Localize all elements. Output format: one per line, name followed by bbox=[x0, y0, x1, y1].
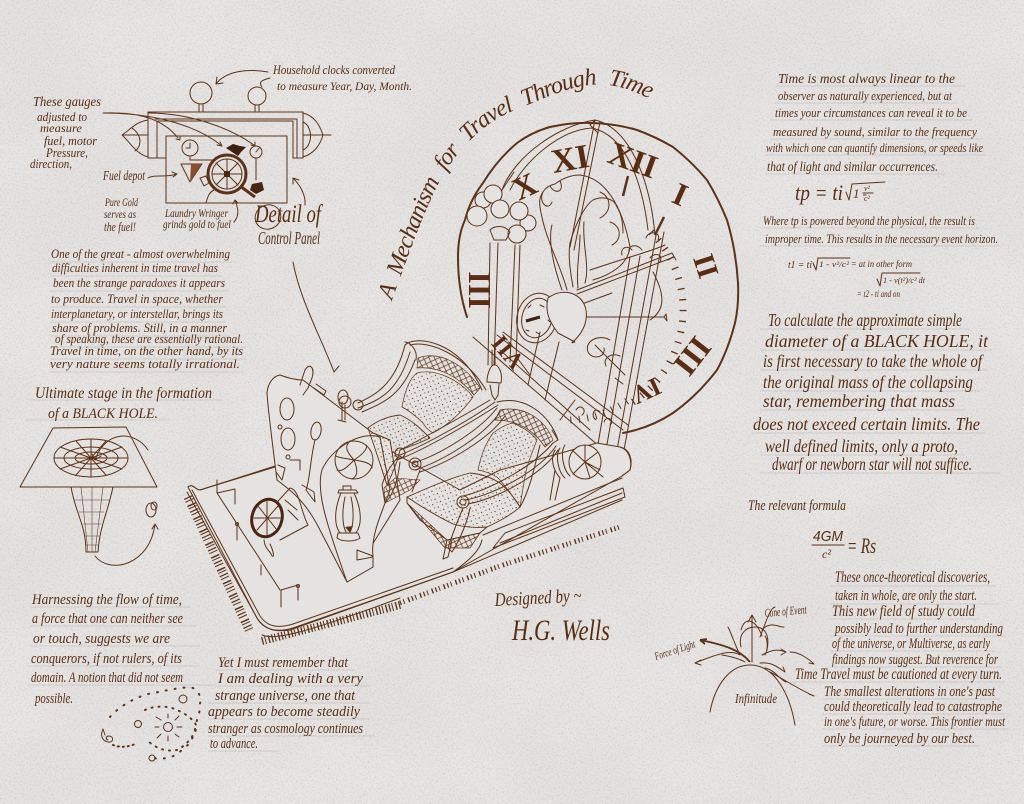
icon: left gauge bbox=[190, 82, 212, 112]
text block: linear time: Time is most always linear to the bbox=[778, 72, 955, 87]
text block: improper time bbox=[763, 214, 998, 246]
roman numerals: XI bbox=[548, 138, 592, 181]
text block: black hole diameter: diameter of a BLACK HOLE, it bbox=[765, 331, 989, 351]
label: force of light: Force of Light bbox=[653, 638, 697, 663]
icon: exit sphere bbox=[146, 502, 157, 517]
clock hands bbox=[560, 253, 676, 321]
note: fuel depot: Fuel depot bbox=[102, 169, 146, 184]
fringe bbox=[188, 497, 620, 641]
icon: fuel triangle bbox=[181, 164, 202, 182]
note: detail of control panel: Detail of bbox=[254, 201, 323, 228]
text block: strange universe: Yet I must remember that bbox=[218, 655, 349, 671]
support columns bbox=[473, 230, 665, 450]
text block: strange universe: stranger as cosmology continues bbox=[208, 721, 363, 737]
arrow: detail to console bbox=[293, 262, 339, 372]
text block: strange universe: strange universe, one that bbox=[215, 688, 356, 704]
roman numerals: I bbox=[667, 175, 693, 213]
roman numerals bbox=[461, 136, 725, 410]
note: gauges: Pressure, bbox=[45, 145, 88, 160]
roman numerals: IV bbox=[627, 371, 666, 410]
note: laundry wringer bbox=[163, 200, 238, 231]
text block: paradoxes paragraph bbox=[50, 246, 243, 371]
text block: strange universe bbox=[208, 655, 364, 752]
note: gauges: measure bbox=[40, 121, 83, 135]
text block: black hole diameter: does not exceed certain limits. The bbox=[753, 414, 980, 434]
text block: paradoxes paragraph: been the strange paradoxes it appears bbox=[53, 275, 225, 290]
heading: black hole stage: of a BLACK HOLE. bbox=[48, 406, 158, 422]
note: pure gold bbox=[104, 195, 139, 234]
text block: strange universe: I am dealing with a very bbox=[217, 671, 364, 687]
note: gauges: adjusted to bbox=[37, 109, 87, 124]
icon: right gauge bbox=[248, 87, 266, 112]
note: detail of control panel bbox=[251, 178, 323, 248]
balloons bbox=[467, 185, 536, 243]
text block: future discoveries: This new field of study could bbox=[832, 603, 975, 620]
text block: harnessing time: conquerors, if not rulers, of its bbox=[31, 651, 182, 667]
text block: linear time: observer as naturally experienced, but at bbox=[778, 89, 952, 103]
text block: paradoxes paragraph: share of problems. Still, in a manner bbox=[52, 320, 228, 335]
text block: black hole diameter: the original mass of the collapsing bbox=[763, 372, 973, 392]
note: household clocks bbox=[272, 62, 412, 93]
text block: harnessing time: a force that one can neither see bbox=[32, 611, 183, 627]
text block: paradoxes paragraph: One of the great - almost overwhelming bbox=[51, 246, 230, 261]
text block: harnessing time: or touch, suggests we are bbox=[33, 631, 171, 647]
text block: black hole diameter: star, remembering that mass bbox=[763, 391, 955, 411]
text block: linear time: measured by sound, similar to the frequency bbox=[773, 125, 977, 139]
clock face bbox=[458, 120, 738, 450]
icon: wringer wheel bbox=[208, 155, 255, 197]
text block: future discoveries: only be journeyed by our best. bbox=[824, 731, 975, 747]
arrow: into black hole bbox=[92, 436, 148, 460]
text block: linear time bbox=[766, 72, 983, 175]
roman numerals: XII bbox=[603, 136, 662, 186]
text block: paradoxes paragraph: to produce. Travel in space, whether bbox=[51, 291, 224, 306]
formula: proper time: tp = ti bbox=[795, 180, 843, 205]
roman numerals: VII bbox=[487, 330, 530, 374]
formula: derivation bbox=[788, 258, 926, 299]
label: cone of event: Cone of Event bbox=[764, 602, 808, 620]
formula: schwarzschild radius: = Rs bbox=[847, 533, 876, 558]
note: pure gold: the fuel! bbox=[104, 219, 136, 234]
rear armchair bbox=[338, 341, 498, 503]
icon: striped ball bbox=[335, 441, 373, 479]
small dial bbox=[511, 289, 563, 347]
text block: black hole diameter: is first necessary to take the whole of bbox=[763, 351, 984, 371]
note: gauges: direction, bbox=[30, 156, 72, 171]
diagram: control panel bbox=[103, 82, 331, 203]
formula: schwarzschild radius: The relevant formula bbox=[748, 498, 846, 514]
formula: derivation: = t2 - ti and on bbox=[857, 289, 900, 299]
formula: proper time: c² bbox=[864, 194, 871, 203]
control console bbox=[248, 366, 400, 582]
formula: proper time: 1 - bbox=[853, 186, 867, 201]
icon: solar system sketch bbox=[102, 687, 201, 761]
clock ticks bbox=[570, 176, 683, 420]
text block: harnessing time bbox=[31, 592, 183, 707]
roman numerals: III bbox=[461, 271, 497, 309]
label: infinitude: Infinitude bbox=[734, 692, 777, 707]
title: A Mechanism for Travel Through Time bbox=[380, 68, 653, 302]
text block: improper time: Where tp is powered beyond the physical, the result is bbox=[763, 214, 975, 228]
teardrop panel bbox=[320, 436, 390, 582]
front armchair bbox=[407, 401, 558, 559]
signature bbox=[493, 585, 610, 647]
formula: proper time bbox=[795, 180, 885, 205]
text block: black hole diameter bbox=[753, 310, 989, 474]
text block: strange universe: to advance. bbox=[210, 736, 258, 752]
steering wheel bbox=[248, 488, 308, 556]
formula: schwarzschild radius: c² bbox=[822, 547, 831, 561]
text block: harnessing time: Harnessing the flow of time, bbox=[31, 592, 182, 608]
arrow: to clock gauges bbox=[216, 70, 270, 87]
text block: black hole diameter: To calculate the approximate simple bbox=[768, 310, 962, 330]
text block: paradoxes paragraph: interplanetary, or interstellar, brings its bbox=[51, 306, 223, 321]
roman numerals: X bbox=[506, 165, 543, 207]
formula: derivation: 1 - v(t²)/c² dt bbox=[883, 276, 926, 285]
arrow: funnel to white hole bbox=[95, 524, 158, 565]
text block: harnessing time: domain. A notion that did not seem bbox=[31, 670, 183, 686]
signature: Designed by ~ bbox=[493, 585, 582, 611]
panel: control panel detail bbox=[30, 62, 412, 248]
diagram: cone of event bbox=[653, 602, 814, 725]
heading: black hole stage: Ultimate stage in the formation bbox=[35, 385, 212, 402]
text block: harnessing time: possible. bbox=[34, 691, 73, 707]
note: household clocks: to measure Year, Day, Month. bbox=[277, 79, 412, 93]
signature: H.G. Wells bbox=[511, 614, 610, 647]
formula: derivation: 1 - v²/c² bbox=[819, 260, 850, 269]
text block: black hole diameter: well defined limits, only a proto, bbox=[765, 436, 958, 456]
pulley wheel bbox=[550, 445, 603, 500]
icon: lantern bbox=[336, 486, 360, 541]
formula: proper time: v² bbox=[864, 184, 871, 193]
railing bbox=[217, 480, 300, 607]
text block: strange universe: appears to become steadily bbox=[208, 704, 361, 720]
formula: schwarzschild radius bbox=[748, 498, 876, 561]
platform bbox=[187, 400, 631, 641]
formula: derivation: = at in other form bbox=[851, 259, 912, 269]
text block: future discoveries bbox=[795, 569, 1006, 747]
note: laundry wringer: grinds gold to fuel bbox=[163, 219, 231, 231]
note: detail of control panel: Control Panel bbox=[258, 228, 320, 248]
note: pure gold: serves as bbox=[104, 207, 136, 221]
formula: derivation: t1 = ti bbox=[788, 259, 812, 271]
text block: paradoxes paragraph: very nature seems totally irrational. bbox=[50, 356, 240, 371]
note: gauges bbox=[30, 94, 101, 171]
text block: paradoxes paragraph: of speaking, these are essentially rational. bbox=[55, 331, 243, 346]
note: laundry wringer: Laundry Wringer bbox=[164, 208, 228, 220]
note: gauges: These gauges bbox=[33, 94, 101, 109]
text block: paradoxes paragraph: difficulties inherent in time travel has bbox=[52, 260, 218, 275]
note: pure gold: Pure Gold bbox=[104, 195, 139, 209]
diagram: black hole funnel bbox=[20, 427, 158, 565]
text block: paradoxes paragraph: Travel in time, on the other hand, by its bbox=[50, 343, 243, 358]
illustration: time machine bbox=[187, 120, 738, 641]
text block: linear time: that of light and similar occurrences. bbox=[767, 160, 938, 175]
roman numerals: II bbox=[686, 250, 725, 282]
text block: linear time: times your circumstances can reveal it to be bbox=[775, 106, 967, 120]
note: household clocks: Household clocks converted bbox=[272, 62, 395, 77]
note: gauges: fuel, motor bbox=[44, 133, 98, 148]
heading: black hole stage bbox=[35, 385, 212, 422]
formula: schwarzschild radius: 4GM bbox=[813, 528, 843, 545]
hemisphere hub bbox=[547, 292, 586, 343]
center finial bbox=[487, 350, 501, 400]
roman numerals: III bbox=[666, 329, 718, 382]
